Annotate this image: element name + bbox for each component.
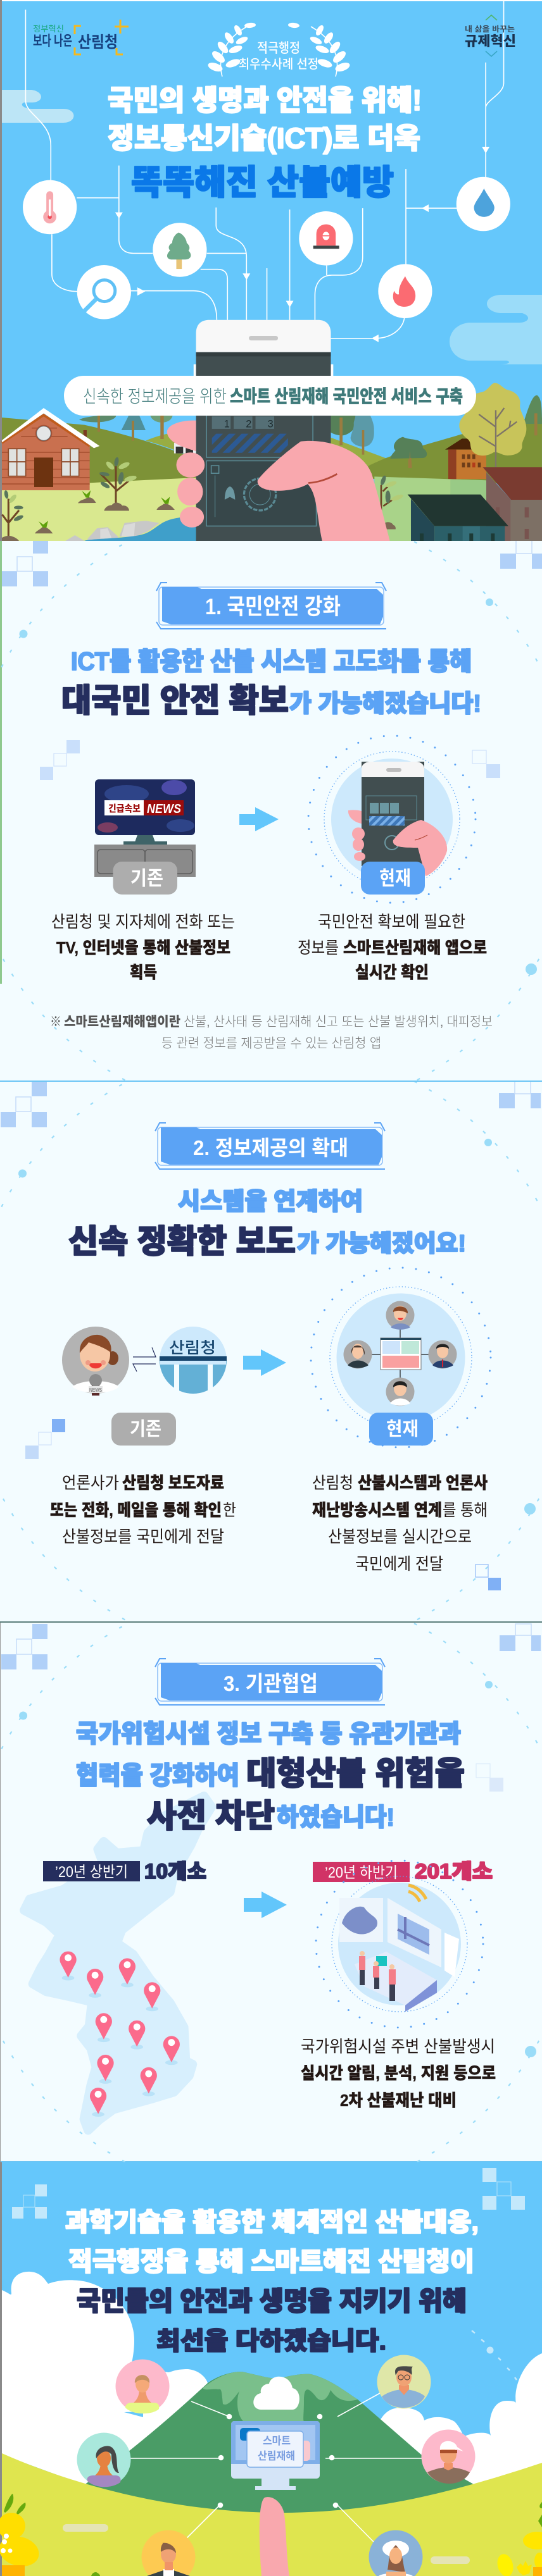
logo: 보다 나은 산림청 [33, 20, 129, 54]
text: section 3 description: 실시간 알림, 분석, 지원 등으로 [301, 2064, 496, 2083]
logo: 규제혁신: 규제혁신 [465, 34, 516, 49]
icon: person man cap [422, 2429, 475, 2484]
icon: TV [94, 779, 196, 877]
text: section 3 headline: 대형산불 위험을 [246, 1756, 465, 1792]
icon: monitor: 산림재해 [258, 2450, 295, 2462]
label: first half 10: ’20년 상반기 [55, 1864, 128, 1881]
text: now: 국민안전 확보에 필요한 [318, 912, 465, 931]
icon: TV: 긴급속보 [108, 803, 141, 814]
brick building [445, 438, 482, 450]
badge: laurel wreath [207, 22, 351, 77]
arrow [239, 807, 279, 831]
rocks [65, 521, 160, 541]
text: section 3 description: 2차 산불재난 대비 [340, 2091, 457, 2110]
text: footnote [50, 1015, 493, 1051]
label: 현재: 현재 [386, 1419, 419, 1440]
text: before: 한 [223, 1501, 236, 1520]
badge: laurel wreath: 적극행정 [257, 41, 300, 56]
icon: person woman pink [115, 2360, 170, 2417]
saplings [2, 464, 129, 536]
text: now: 스마트산림재해 앱으로 [343, 938, 487, 957]
logo: 보다 나은 산림청: 보다 나은 [33, 33, 72, 49]
network lines [130, 2393, 423, 2542]
text: section 2 headline: 신속 정확한 보도 [68, 1223, 296, 1260]
text: closing message: 국민들의 안전과 생명을 지키기 위해 [77, 2286, 467, 2316]
icon: exchange arrows [133, 1347, 156, 1372]
field [374, 476, 486, 541]
callout: service pill: 신속한 정보제공을 위한 [83, 387, 227, 406]
text: before: 언론사가 [62, 1473, 119, 1492]
text: closing message [65, 2208, 479, 2355]
icon: person man orange [142, 2530, 195, 2576]
icon: phone in circle [308, 736, 476, 903]
icon: magnifier [77, 265, 131, 319]
text: now: 실시간 확인 [355, 963, 429, 982]
icon: person man glasses [377, 2355, 431, 2409]
smartphone [194, 320, 333, 542]
text: footnote: 스마트산림재해앱이란 [64, 1015, 180, 1029]
icon: monitor [231, 2421, 320, 2576]
icon: 산림청 building: 산림청 [169, 1339, 216, 1357]
icon: alarm [299, 211, 353, 266]
logo: 규제혁신 [465, 15, 516, 56]
icon: cloud [253, 2377, 299, 2410]
text: section 3 headline: 하였습니다! [277, 1804, 394, 1831]
hill [2, 2453, 542, 2576]
mountain [84, 2372, 474, 2524]
clouds [2, 90, 73, 123]
text: now: 재난방송시스템 연계 [312, 1501, 442, 1520]
illustration: control room [316, 1861, 483, 2028]
text: section 1 headline: ICT를 활용한 산불 시스템 고도화를 통해 [71, 648, 472, 676]
text: section 3 headline [76, 1721, 465, 1834]
text: now [298, 912, 487, 982]
heading: 3. 기관협업: 3. 기관협업 [224, 1672, 318, 1696]
icon: water drop [457, 177, 510, 231]
title: 똑똑해진 산불예방 [131, 164, 394, 202]
logo: 보다 나은 산림청: 산림청 [78, 34, 118, 51]
panel: section 2 [0, 1082, 542, 1623]
badge: laurel wreath: 최우수사례 선정 [239, 57, 318, 71]
text: before: 산림청 보도자료 [122, 1473, 224, 1492]
heading: 1. 국민안전 강화: 1. 국민안전 강화 [205, 595, 341, 619]
logo: 규제혁신: 내 삶을 바꾸는 [465, 25, 515, 34]
text: now: 산불시스템과 언론사 [358, 1473, 488, 1492]
panel: section 1 [0, 541, 542, 1082]
text: before: 또는 전화, 메일을 통해 확인 [50, 1501, 222, 1520]
text: before [50, 1473, 236, 1546]
heading: 2. 정보제공의 확대: 2. 정보제공의 확대 [193, 1136, 348, 1160]
text: now [312, 1473, 488, 1573]
clouds [2, 2272, 208, 2485]
text: section 1 headline: 가 가능해졌습니다! [289, 691, 481, 717]
label: 기존 [111, 1413, 176, 1446]
text: now: 를 통해 [443, 1501, 488, 1520]
label: second half 201: ’20년 하반기 [325, 1864, 398, 1881]
big tree [459, 383, 526, 455]
flowers [0, 2494, 542, 2576]
icon: person woman teal [77, 2433, 130, 2487]
title [108, 84, 422, 202]
smartphone: 2 [246, 419, 251, 430]
hand [167, 421, 390, 542]
panel: closing scene [0, 2162, 542, 2576]
label: 기존 [113, 862, 177, 895]
map: Korea with pins [24, 1796, 211, 2130]
icon: monitor: 스마트 [263, 2435, 291, 2447]
text: footnote: 산불, 산사태 등 산림재해 신고 또는 산불 발생위치, 대피정보 [184, 1015, 493, 1029]
heading: 2. 정보제공의 확대 [155, 1123, 385, 1169]
text: now: 국민에게 전달 [355, 1554, 443, 1573]
icon: reporter [62, 1327, 129, 1396]
text: closing message: 적극행정을 통해 스마트해진 산림청이 [68, 2247, 474, 2276]
label: second half 201 [313, 1860, 493, 1883]
text: section 3 headline: 사전 차단 [147, 1798, 275, 1834]
icon: TV: NEWS [147, 802, 182, 816]
text: footnote: 등 관련 정보를 제공받을 수 있는 산림청 앱 [161, 1036, 381, 1051]
text: before [51, 912, 235, 982]
text: section 2 headline: 가 가능해졌어요! [297, 1230, 466, 1256]
label: 현재 [361, 862, 425, 895]
text: closing message: 과학기술을 활용한 체계적인 산불대응, [65, 2208, 479, 2236]
text: section 2 headline [68, 1189, 466, 1260]
text: section 3 description [301, 2037, 496, 2110]
label: 현재 [369, 1413, 433, 1446]
icon: tree [153, 223, 207, 277]
label: 기존: 기존 [130, 867, 163, 889]
text: section 2 headline: 시스템을 연계하여 [178, 1189, 363, 1215]
text: now: 정보를 [298, 938, 339, 957]
sapling [381, 485, 396, 511]
teal house [411, 498, 434, 541]
logo: 보다 나은 산림청: 정부혁신 [33, 24, 64, 34]
icon: reporter: NEWS [89, 1387, 102, 1393]
smartphone: 3 [268, 419, 274, 430]
text: section 3 headline: 협력을 강화하여 [76, 1762, 239, 1790]
icon: person woman blue [369, 2530, 423, 2576]
callout: service pill [64, 376, 476, 416]
small portraits [386, 1301, 414, 1330]
text: now: 산림청 [312, 1473, 353, 1492]
circuit lines [25, 0, 504, 338]
text: section 3 headline: 국가위험시설 정보 구축 등 유관기관과 [76, 1721, 461, 1748]
red building [486, 473, 511, 541]
arrow [243, 1349, 286, 1376]
smartphone: 1 [224, 419, 230, 430]
background trees [523, 395, 542, 424]
text: footnote: ※ [50, 1015, 61, 1029]
text: now: 산불정보를 실시간으로 [328, 1527, 472, 1546]
label: first half 10: 10개소 [144, 1860, 206, 1883]
heading: 3. 기관협업 [155, 1659, 385, 1705]
decoration: squares and dots [12, 2168, 525, 2380]
icon: thermometer [23, 180, 77, 234]
arrow [244, 1892, 287, 1918]
icon: 산림청 building [160, 1327, 227, 1394]
icon: flame [378, 264, 432, 318]
panel: section 3 [0, 1623, 542, 2162]
label: 현재: 현재 [379, 867, 411, 889]
landscape: left [2, 408, 196, 541]
text: section 1 headline: 대국민 안전 확보 [61, 683, 289, 719]
callout: service pill: 스마트 산림재해 국민안전 서비스 구축 [230, 387, 463, 406]
text: closing message: 최선을 다하겠습니다. [156, 2328, 386, 2355]
title: 국민의 생명과 안전을 위해! [108, 84, 422, 116]
text: before: 산불정보를 국민에게 전달 [62, 1527, 224, 1546]
stream [84, 517, 196, 541]
text: section 1 headline [61, 648, 481, 719]
panel: hero [0, 0, 542, 542]
text: before: 산림청 및 지자체에 전화 또는 [51, 912, 235, 931]
title: 정보통신기술(ICT)로 더욱 [108, 122, 420, 154]
landscape: right [331, 383, 542, 541]
label: second half 201: 201개소 [415, 1860, 493, 1883]
heading: 1. 국민안전 강화 [156, 583, 386, 629]
label: first half 10 [43, 1860, 206, 1883]
text: before: 획득 [130, 963, 157, 982]
label: 기존: 기존 [130, 1419, 161, 1440]
text: section 3 description: 국가위험시설 주변 산불발생시 [301, 2037, 495, 2056]
text: before: TV, 인터넷을 통해 산불정보 [56, 938, 230, 957]
icon: linked systems [311, 1268, 491, 1447]
